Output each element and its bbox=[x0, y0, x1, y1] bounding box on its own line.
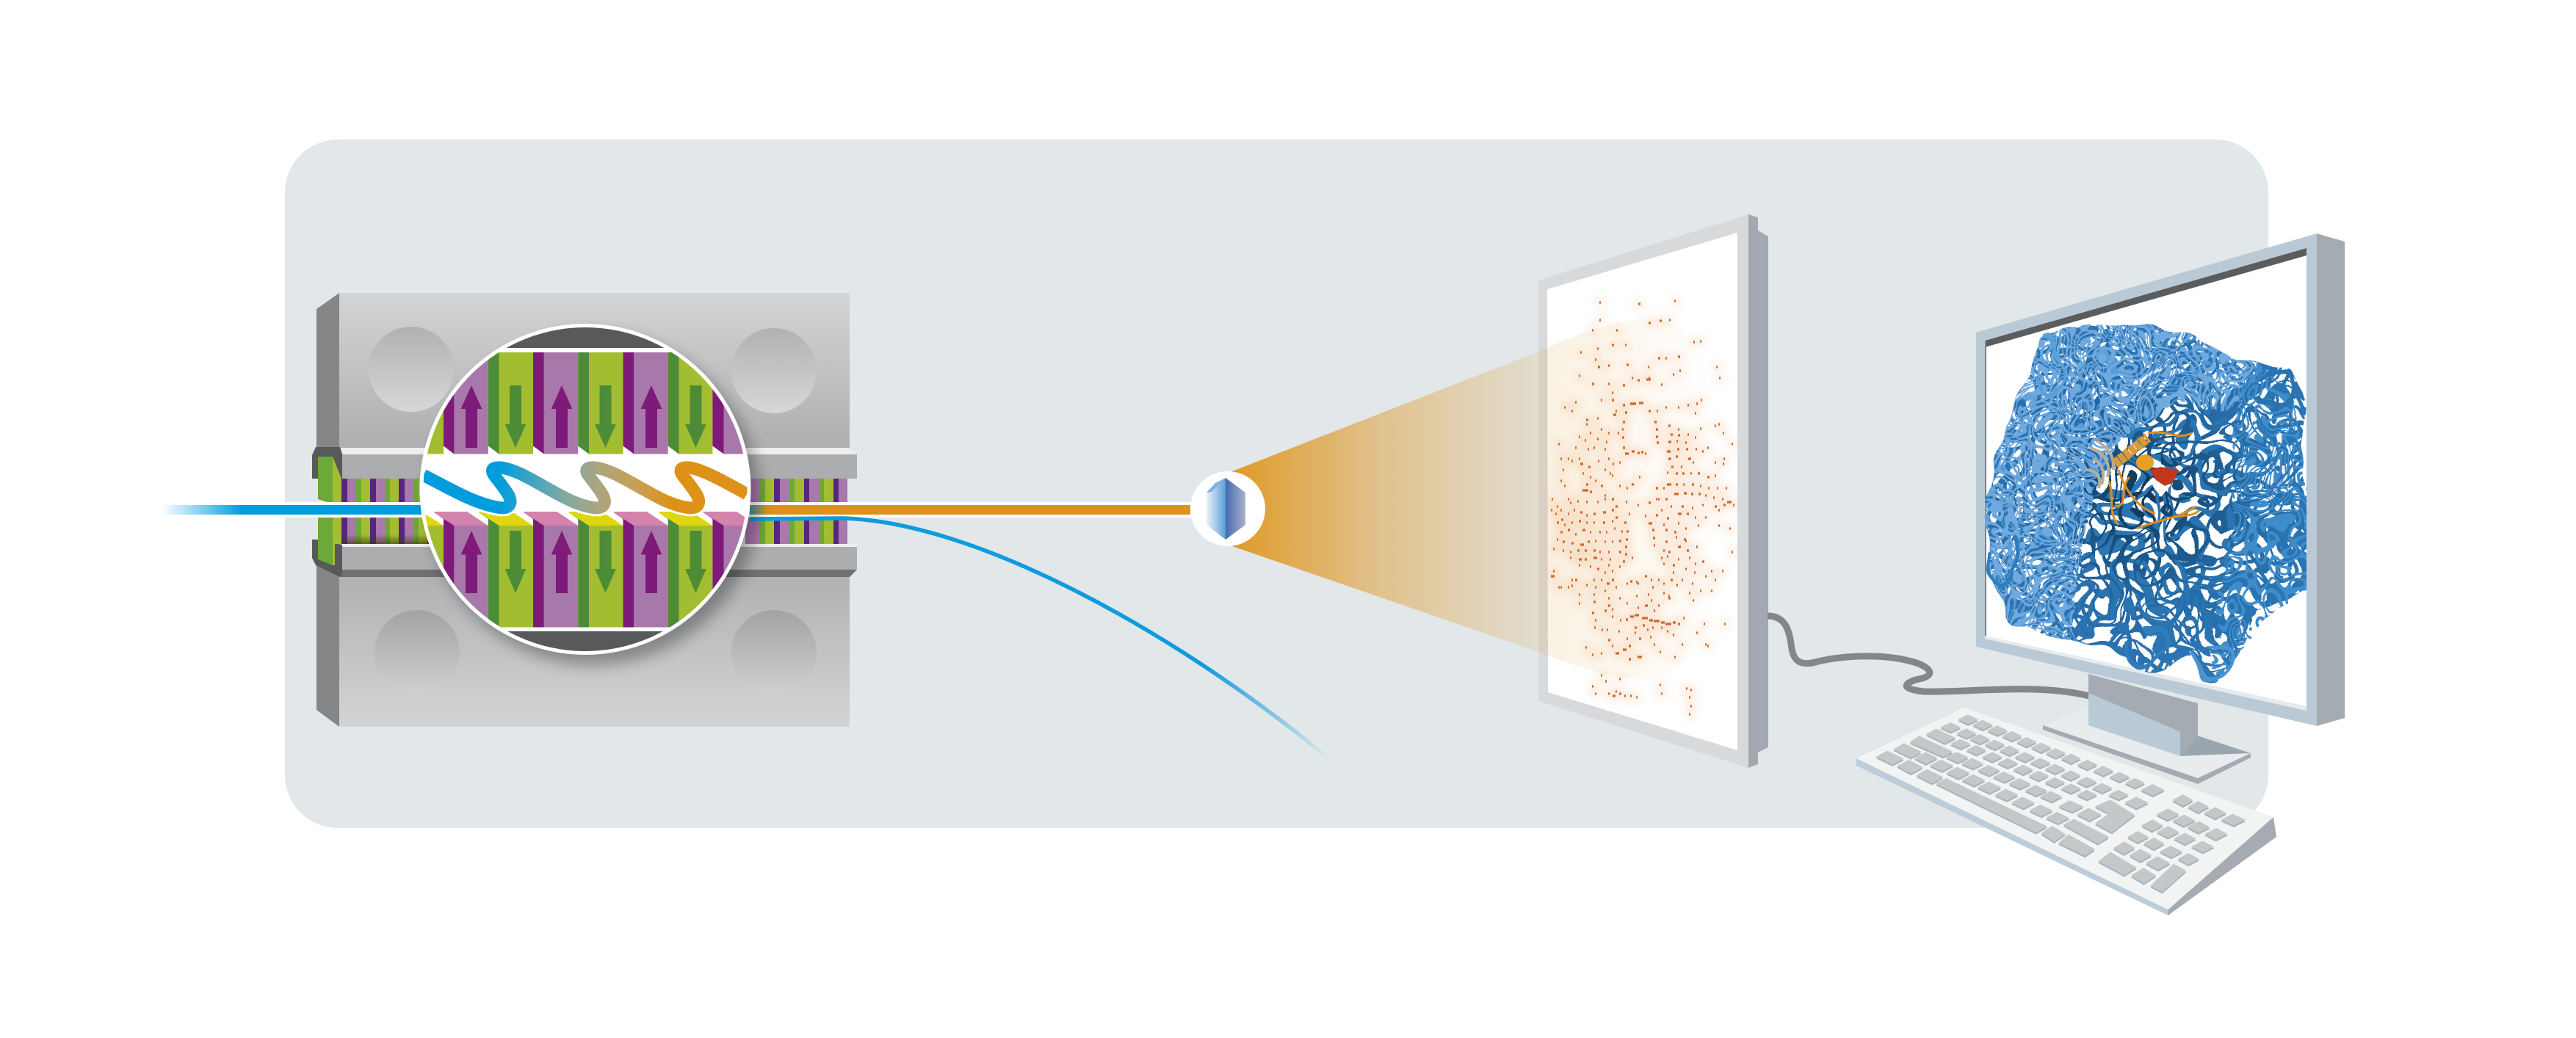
monitor stand bbox=[2043, 674, 2251, 784]
dark ribbons bbox=[1987, 325, 2307, 683]
beige ribbon shading bbox=[2085, 440, 2113, 488]
magnifier lens shadow bbox=[427, 333, 759, 665]
light upper-left ribbons bbox=[1987, 325, 2259, 641]
white cavity bbox=[2152, 477, 2171, 497]
spot glow bbox=[1551, 301, 1734, 714]
spot centres bbox=[1551, 301, 1734, 714]
active site ribbons bbox=[2109, 432, 2199, 529]
upper field arrows bbox=[461, 385, 706, 448]
right ribbons bbox=[2210, 363, 2307, 683]
gold residue cluster bbox=[2136, 454, 2154, 471]
detector panel bbox=[1538, 214, 1768, 768]
upper magnet block bbox=[316, 293, 850, 470]
gold helix bbox=[2115, 438, 2148, 464]
lower magnet columns bbox=[411, 512, 761, 627]
red ligand bbox=[2150, 467, 2179, 486]
deflected electron beam bbox=[750, 518, 1328, 758]
data cable bbox=[1768, 616, 2089, 696]
incoming electron beam bbox=[162, 502, 432, 518]
magnifier lens bbox=[411, 323, 764, 656]
diffraction spots bbox=[1551, 301, 1734, 714]
mid ribbons bbox=[1987, 325, 2307, 683]
lower magnet block bbox=[316, 558, 850, 727]
outline ribbons bbox=[1986, 336, 2296, 678]
protein structure on screen bbox=[1986, 325, 2307, 683]
infographic scene bbox=[164, 139, 2345, 915]
lower caps bbox=[508, 631, 662, 651]
keyboard bbox=[1856, 708, 2276, 915]
lower field arrows bbox=[461, 531, 706, 593]
end bracket bbox=[312, 447, 342, 577]
upper and lower rails bbox=[339, 448, 857, 577]
background panel bbox=[285, 139, 2268, 828]
undulating beam bbox=[424, 468, 747, 508]
deep ribbons bbox=[1987, 325, 2307, 683]
upper magnet columns bbox=[411, 352, 761, 454]
key shadows and key tops bbox=[1875, 714, 2246, 893]
pale upper-left ribbons bbox=[1987, 325, 2259, 641]
outgoing x-ray beam bbox=[745, 502, 1193, 518]
upper caps bbox=[507, 327, 664, 348]
magnet stripes left bbox=[341, 479, 437, 544]
undulator magnet assembly bbox=[312, 293, 857, 727]
x-ray diffraction cone bbox=[1232, 319, 1737, 679]
monitor bbox=[1976, 233, 2345, 726]
sample crystal in beam bbox=[1190, 471, 1265, 546]
keyboard body bbox=[1856, 708, 2276, 915]
magnet stripes right bbox=[745, 479, 847, 544]
